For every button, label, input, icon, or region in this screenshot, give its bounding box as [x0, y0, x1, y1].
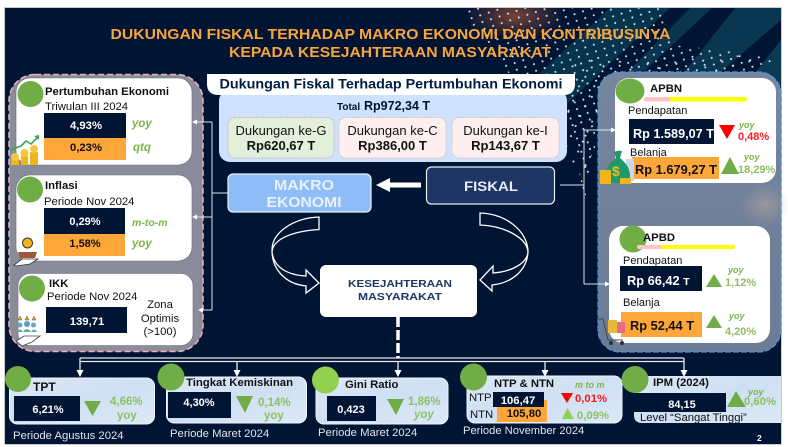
card: ke-I	[452, 118, 559, 158]
icon: money bag	[600, 151, 634, 184]
panel: Pertumbuhan Ekonomi: Pertumbuhan Ekonomi	[45, 86, 169, 98]
panel: APBN: Rp 1.679,27 T	[635, 162, 717, 177]
card: NTP & NTN: 106,47	[501, 395, 535, 407]
card: IPM	[622, 366, 781, 424]
arrow: makro to kesejahteraan	[272, 217, 319, 293]
panel: Pertumbuhan Ekonomi: Triwulan III 2024	[45, 101, 128, 113]
panel: IKK: (>100)	[144, 326, 177, 338]
card: Gini Ratio	[312, 366, 448, 424]
card: ke-C: Rp386,00 T	[358, 138, 427, 153]
panel: APBD: Pendapatan	[623, 255, 682, 267]
panel: Pertumbuhan Ekonomi: yoy	[131, 118, 152, 130]
card: NTP & NTN: NTN	[470, 409, 493, 421]
panel: IKK	[16, 274, 193, 346]
panel: Inflasi: 0,29%	[69, 216, 101, 228]
panel: Pertumbuhan Ekonomi: qtq	[133, 142, 151, 154]
panel: Inflasi: Periode Nov 2024	[44, 196, 134, 208]
panel: APBD: yoy	[728, 311, 746, 321]
panel: APBN: Pendapatan	[628, 105, 687, 117]
panel: IKK: Optimis	[141, 313, 179, 325]
panel: IKK: 139,71	[70, 316, 104, 328]
connector: dashed down	[396, 317, 400, 358]
panel: APBN	[600, 78, 776, 184]
card: Gini Ratio: yoy	[413, 409, 434, 421]
panel: fiscal support: Dukungan Fiskal Terhadap Pertumbuhan Ekonomi	[220, 76, 562, 92]
panel: APBN: yoy	[738, 120, 756, 130]
text: kemiskinan period: Periode Maret 2024	[170, 428, 269, 440]
card: IPM: IPM (2024)	[653, 377, 709, 389]
card: ke-C: Dukungan ke-C	[347, 123, 438, 138]
box: fiskal: FISKAL	[464, 178, 518, 194]
card: Tingkat Kemiskinan	[158, 364, 306, 423]
card: NTP & NTN	[460, 364, 622, 423]
panel: APBN: 0,48%	[738, 131, 769, 143]
box: makro ekonomi: EKONOMI	[266, 195, 342, 211]
card: Tingkat Kemiskinan: yoy	[264, 410, 284, 422]
card: TPT	[5, 366, 154, 424]
panel: Inflasi	[14, 175, 192, 266]
box: makro ekonomi	[228, 174, 371, 212]
panel: APBN: APBN	[650, 83, 682, 95]
connector: outcome lines	[76, 358, 688, 377]
card: IPM: yoy	[747, 387, 765, 397]
card: ke-I: Dukungan ke-I	[463, 123, 548, 138]
panel: APBN: Rp 1.589,07 T	[633, 126, 714, 141]
panel: Pertumbuhan Ekonomi: 0,23%	[70, 142, 102, 154]
connector lines: makro to indicators	[192, 120, 228, 312]
icon: shopping cart	[597, 319, 625, 345]
card: IPM: 0,60%	[744, 396, 776, 408]
card: TPT: 4,66%	[110, 396, 143, 408]
panel: APBD: APBD	[643, 232, 675, 244]
panel: fiscal support: Rp972,34 T	[364, 99, 430, 113]
text: TPT period: Periode Agustus 2024	[13, 430, 124, 442]
card: ke-G	[228, 118, 334, 158]
panel: APBD: Rp 66,42 T	[627, 273, 690, 288]
arrow: fiskal to makro	[376, 178, 421, 192]
panel: APBN: Belanja	[630, 147, 668, 159]
title: DUKUNGAN FISKAL TERHADAP MAKRO EKONOMI DAN KONTRIBUSINYA	[110, 26, 671, 43]
card: ke-G: Dukungan ke-G	[235, 123, 327, 138]
panel: IKK: Periode Nov 2024	[47, 291, 137, 303]
card: Gini Ratio: 1,86%	[408, 396, 441, 408]
panel: APBD	[597, 226, 770, 345]
card: IPM: Level “Sangat Tinggi”	[640, 412, 747, 424]
card: TPT: 6,21%	[32, 404, 64, 416]
text: NTP period: Periode November 2024	[463, 425, 584, 437]
panel: Inflasi: Inflasi	[45, 180, 78, 192]
box: kesejahteraan masyarakat: KESEJAHTERAAN	[348, 278, 452, 290]
panel: fiscal support	[207, 74, 575, 162]
panel: Pertumbuhan Ekonomi	[10, 78, 192, 165]
panel: APBD: 1,12%	[725, 277, 756, 289]
card: ke-G: Rp620,67 T	[247, 138, 315, 153]
card: NTP & NTN: 105,80	[507, 408, 541, 420]
panel: budget background	[598, 72, 788, 352]
box: fiskal	[426, 167, 554, 204]
panel: APBN: 18,29%	[738, 164, 776, 176]
box: kesejahteraan masyarakat	[320, 265, 477, 317]
box: kesejahteraan masyarakat: MASYARAKAT	[358, 291, 443, 303]
card: NTP & NTN: NTP & NTN	[494, 378, 554, 390]
arrow: fiskal to kesejahteraan	[480, 213, 528, 291]
card: TPT: TPT	[33, 380, 56, 394]
panel: Inflasi: 1,58%	[69, 238, 101, 250]
card: Tingkat Kemiskinan: 4,30%	[183, 397, 215, 409]
panel: APBD: 4,20%	[725, 326, 756, 338]
text: gini period: Periode Maret 2024	[318, 427, 417, 439]
card: ke-C	[339, 118, 446, 158]
panel: left macro indicators background	[9, 74, 203, 352]
panel: fiscal support: Total	[337, 102, 360, 113]
icon: hand with coin	[14, 238, 38, 266]
card: NTP & NTN: NTP	[469, 392, 492, 404]
icon: growth coins	[10, 135, 39, 165]
box: makro ekonomi: MAKRO	[274, 178, 334, 194]
panel: IKK: Zona	[147, 299, 174, 311]
card: Tingkat Kemiskinan: 0,14%	[258, 397, 291, 409]
panel: APBD: Rp 52,44 T	[630, 318, 694, 333]
panel: Pertumbuhan Ekonomi: 4,93%	[70, 120, 102, 132]
card: TPT: yoy	[117, 410, 137, 422]
card: Gini Ratio: 0,423	[337, 404, 365, 416]
card: ke-I: Rp143,67 T	[471, 138, 540, 153]
panel: Inflasi: m-to-m	[132, 217, 168, 229]
title	[110, 26, 671, 61]
title: KEPADA KESEJAHTERAAN MASYARAKAT	[229, 44, 551, 61]
page number: 2	[757, 433, 762, 443]
card: NTP & NTN: m to m	[575, 380, 605, 390]
card: Gini Ratio: Gini Ratio	[345, 379, 398, 391]
panel: APBD: Belanja	[623, 297, 661, 309]
panel: APBN: yoy	[743, 152, 761, 162]
panel: IKK: IKK	[49, 278, 69, 290]
icon: money bag: $	[612, 163, 620, 179]
card: NTP & NTN: 0,01%	[575, 393, 607, 405]
card: IPM: 84,15	[668, 399, 696, 411]
connector lines: fiskal to budgets	[560, 128, 616, 286]
panel: Inflasi: yoy	[131, 238, 152, 250]
card: NTP & NTN: 0,09%	[577, 410, 609, 422]
icon: people on hand	[16, 316, 40, 346]
card: Tingkat Kemiskinan: Tingkat Kemiskinan	[186, 377, 293, 389]
panel: APBD: yoy	[727, 265, 745, 275]
